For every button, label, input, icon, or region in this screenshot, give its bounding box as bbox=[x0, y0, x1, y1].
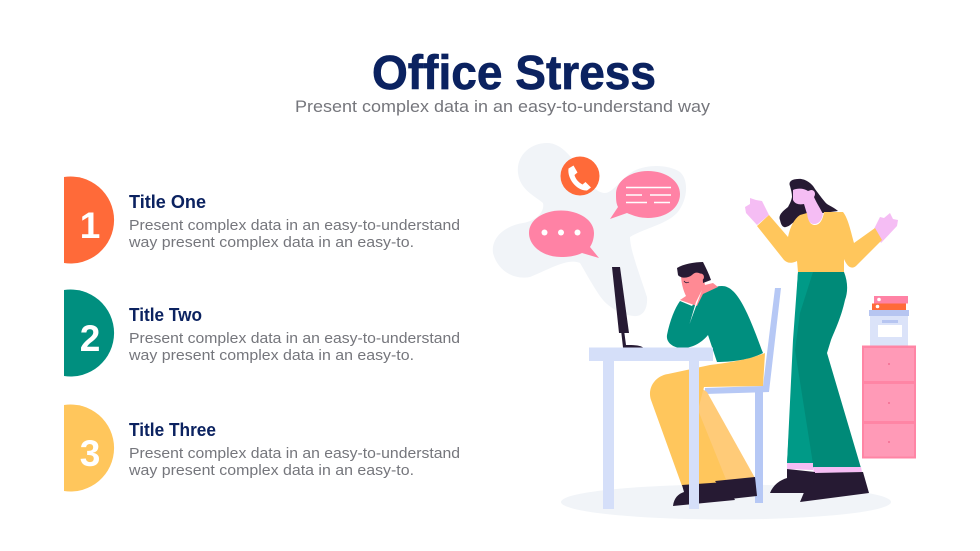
badge: number 1: 1 bbox=[80, 205, 100, 246]
standing woman: cuffs bbox=[787, 463, 862, 473]
seated man: front leg bbox=[650, 353, 765, 486]
chair bbox=[705, 288, 781, 503]
title: Office Stress bbox=[372, 47, 656, 100]
heading: title one: Title One bbox=[129, 192, 206, 212]
standing woman: sweater bbox=[757, 212, 882, 272]
badge: number 3 bbox=[64, 404, 114, 492]
badge: number 2: 2 bbox=[80, 318, 100, 359]
storage box bbox=[869, 310, 909, 346]
floor shadow bbox=[561, 484, 891, 520]
subtitle: Present complex data in an easy-to-understand way bbox=[295, 97, 711, 116]
speech bubble: lines bbox=[610, 171, 680, 219]
desk bbox=[589, 348, 713, 509]
badge: number 2 bbox=[64, 290, 114, 376]
standing woman: hands bbox=[745, 198, 898, 243]
text block: description one bbox=[128, 217, 460, 251]
standing woman: face and neck bbox=[793, 189, 823, 224]
standing woman: trousers bbox=[787, 272, 861, 468]
panel: item one bbox=[64, 177, 460, 263]
badge: number 3: 3 bbox=[80, 433, 100, 474]
text block: description three: Present complex data in an easy-to-understand bbox=[129, 445, 460, 462]
background blob bbox=[493, 143, 686, 316]
text block: description two bbox=[128, 330, 460, 364]
standing woman: shoes bbox=[770, 469, 869, 502]
seated man: collar bbox=[690, 290, 702, 324]
heading: title three: Title Three bbox=[129, 420, 216, 440]
text block: description three: way present complex data in an easy-to. bbox=[128, 462, 414, 479]
seated man: torso bbox=[667, 286, 763, 362]
text block: description one: way present complex data in an easy-to. bbox=[128, 234, 414, 251]
stacked binders bbox=[872, 296, 908, 310]
icon: phone bbox=[560, 156, 600, 196]
text block: description three bbox=[128, 445, 460, 479]
badge: number 1 bbox=[64, 177, 114, 263]
panel: item two bbox=[64, 290, 460, 376]
speech bubble: dots bbox=[529, 210, 599, 258]
seated man: head bbox=[677, 262, 718, 306]
computer monitor bbox=[612, 267, 643, 348]
text block: description two: Present complex data in an easy-to-understand bbox=[129, 330, 460, 347]
seated man: back leg bbox=[695, 384, 755, 482]
text block: description one: Present complex data in an easy-to-understand bbox=[129, 217, 460, 234]
panel: item three bbox=[64, 404, 460, 492]
text block: description two: way present complex data in an easy-to. bbox=[128, 347, 414, 364]
seated man: shoes bbox=[673, 477, 757, 506]
filing cabinet bbox=[862, 346, 916, 458]
standing woman: hair bbox=[780, 179, 838, 227]
heading: title two: Title Two bbox=[129, 305, 202, 325]
illustration: stressed office scene bbox=[493, 143, 916, 520]
